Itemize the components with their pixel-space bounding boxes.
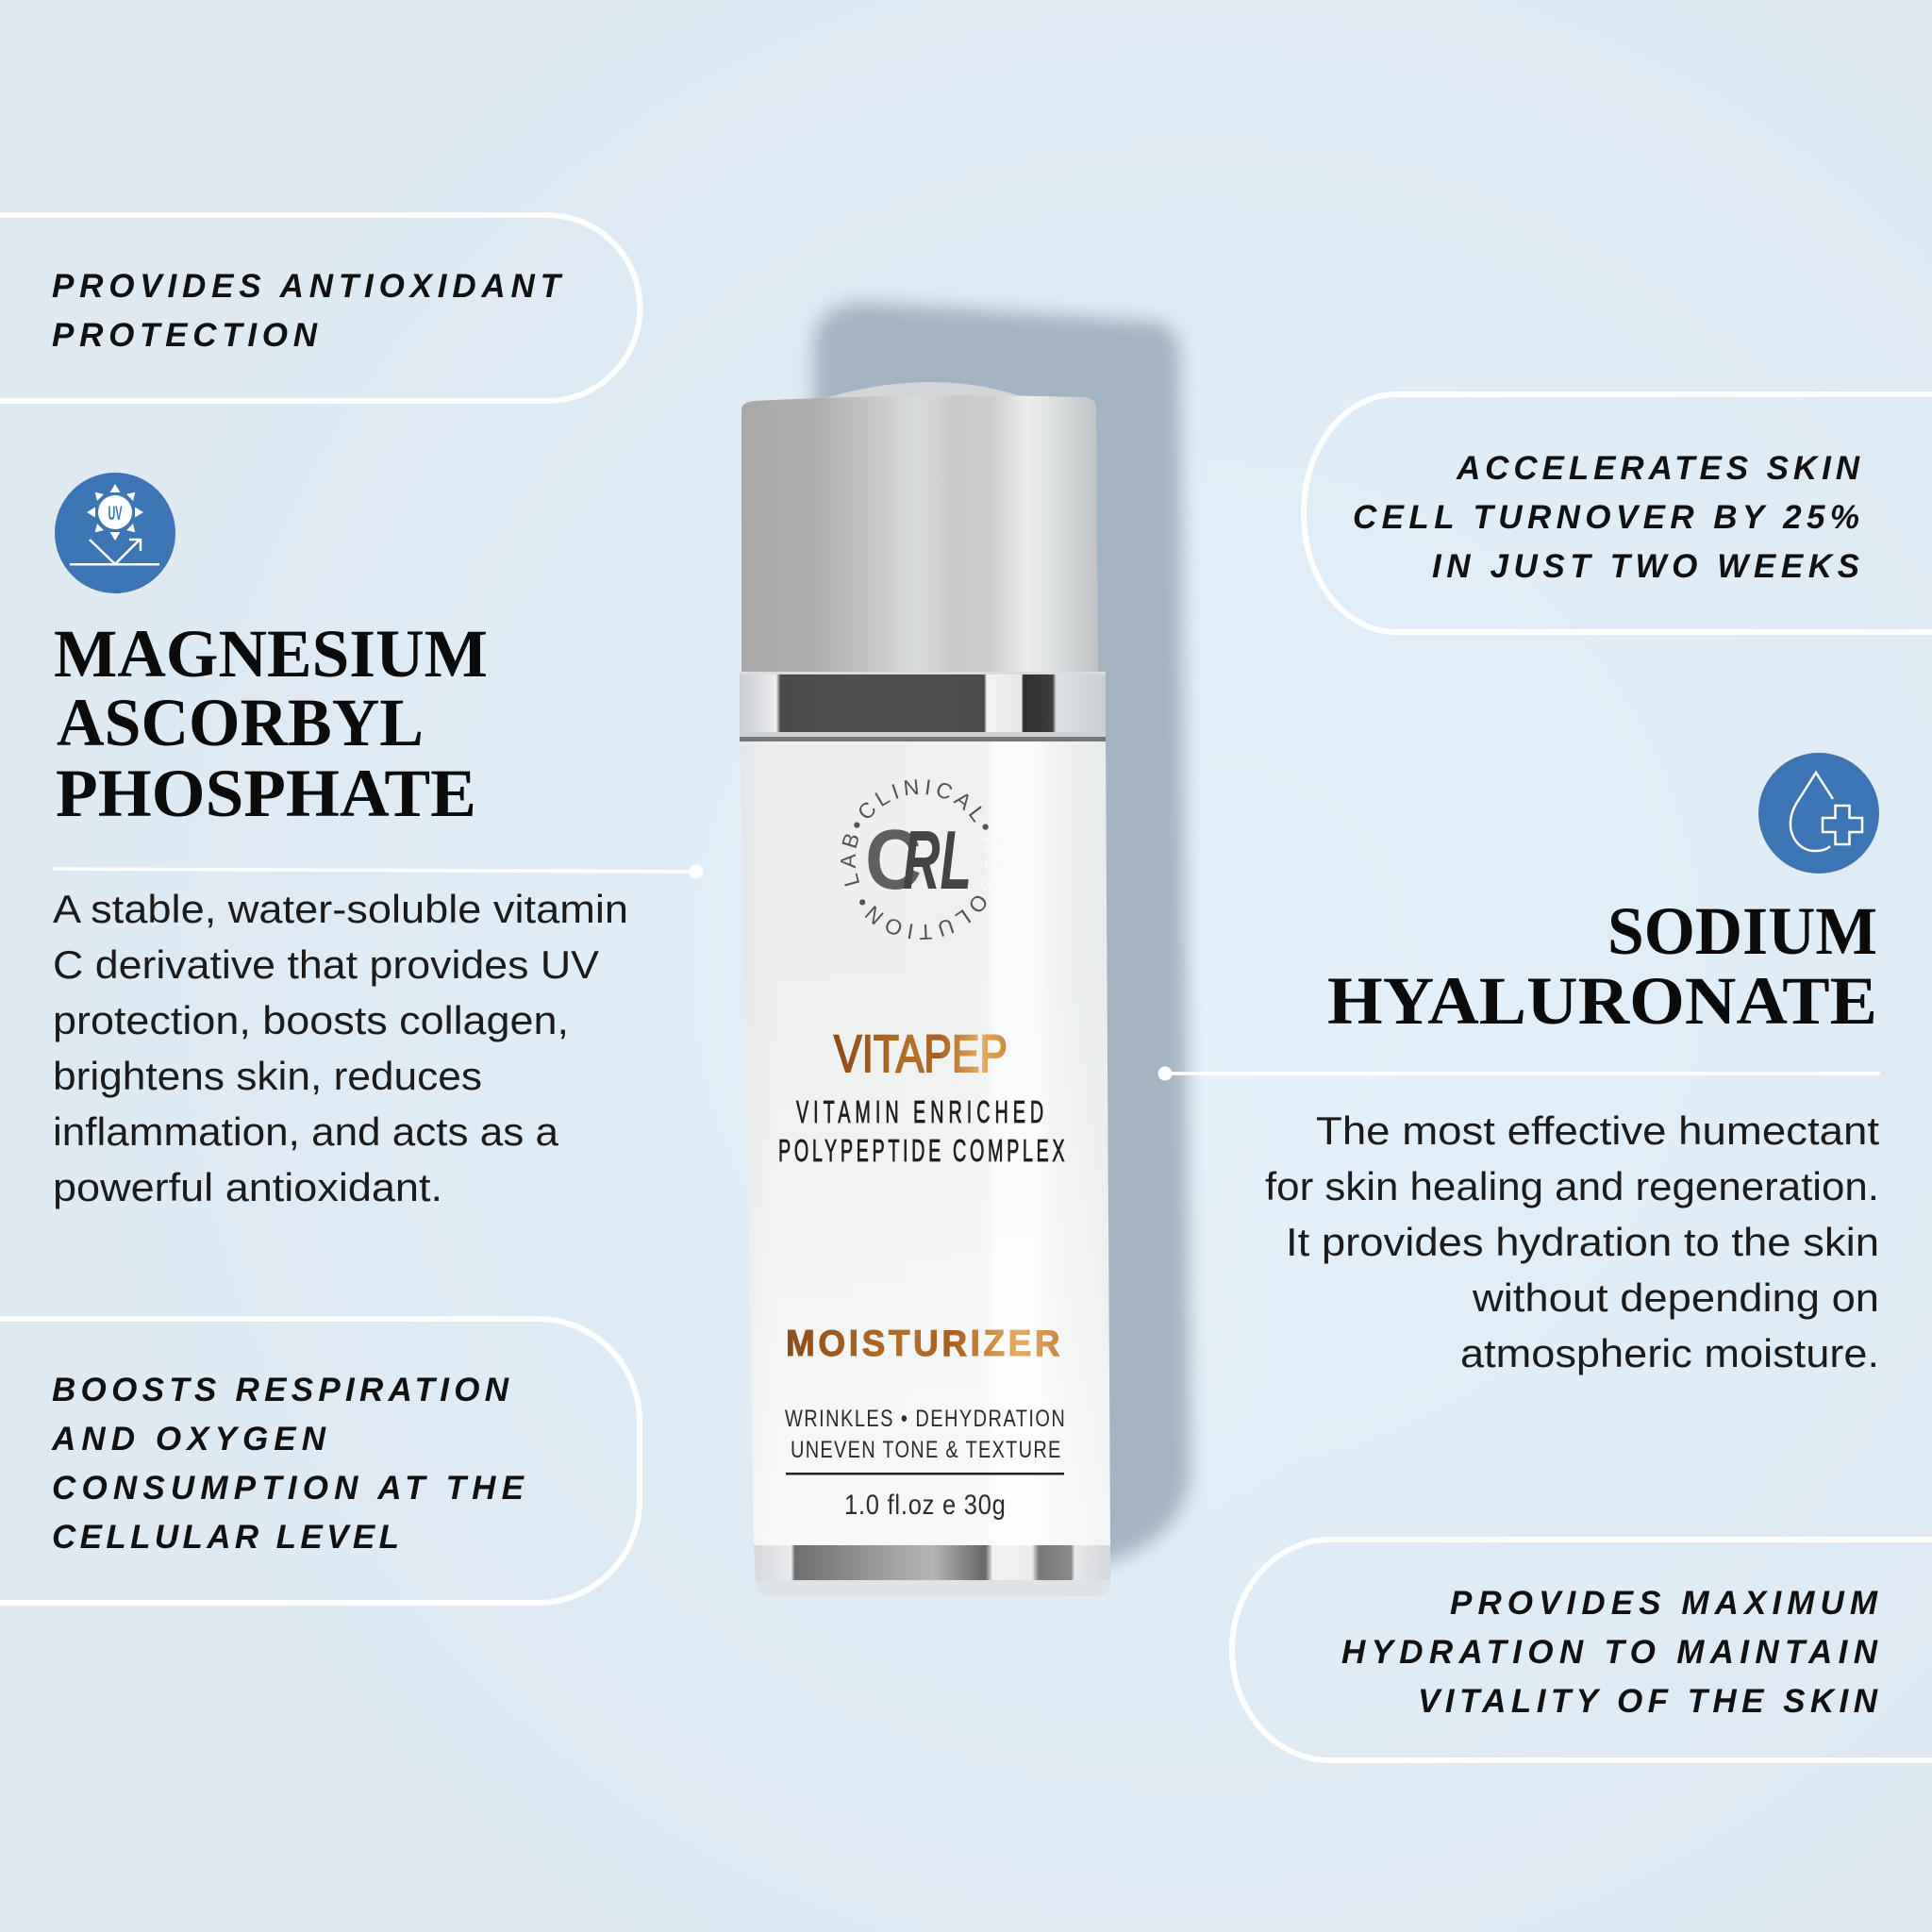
- description: for skin healing and regeneration.: [1265, 1164, 1879, 1208]
- silver cap: [741, 395, 1098, 673]
- description: atmospheric moisture.: [1460, 1331, 1879, 1375]
- icon: UV protection: UV: [108, 503, 123, 525]
- pill: skin cell turnover: CELL TURNOVER BY 25%: [1353, 499, 1859, 536]
- pill: cellular respiration: AND OXYGEN: [51, 1421, 326, 1457]
- bottle body: [741, 741, 1110, 1547]
- product type: MOISTURIZER: [786, 1324, 1060, 1364]
- CRL monogram: RL: [903, 813, 972, 907]
- pill: maximum hydration: VITALITY OF THE SKIN: [1418, 1683, 1878, 1720]
- heading: SODIUM: [1607, 893, 1877, 969]
- pill: antioxidant protection: [0, 215, 640, 401]
- heading: PHOSPHATE: [56, 756, 476, 831]
- chrome collar: [740, 672, 1106, 738]
- pill: cellular respiration: [0, 1319, 640, 1603]
- panel: sodium hyaluronate: [1158, 753, 1880, 1375]
- concerns list: UNEVEN TONE & TEXTURE: [791, 1437, 1060, 1463]
- pill: cellular respiration: CELLULAR LEVEL: [52, 1519, 399, 1556]
- concerns list: [785, 1406, 1065, 1463]
- CRL monogram: [865, 813, 972, 908]
- bottom chrome ring: [754, 1545, 1110, 1580]
- pill: maximum hydration: PROVIDES MAXIMUM: [1450, 1585, 1878, 1622]
- product bottle: [740, 382, 1110, 1596]
- pill: skin cell turnover: IN JUST TWO WEEKS: [1432, 548, 1859, 585]
- pill: cellular respiration: CONSUMPTION AT THE: [52, 1470, 525, 1507]
- brand name: VITAPEP: [834, 1024, 1008, 1083]
- concerns list: WRINKLES • DEHYDRATION: [785, 1406, 1065, 1432]
- heading: MAGNESIUM: [54, 616, 488, 691]
- panel: magnesium ascorbyl phosphate: [53, 473, 704, 1209]
- clear base: [756, 1580, 1110, 1596]
- description: C derivative that provides UV: [53, 942, 599, 987]
- description: It provides hydration to the skin: [1286, 1220, 1879, 1264]
- description: [53, 887, 628, 1209]
- description: without depending on: [1472, 1275, 1879, 1320]
- icon: water drop with plus: [1758, 753, 1879, 874]
- pill: antioxidant protection: PROVIDES ANTIOXIDANT: [52, 268, 563, 305]
- pill: cellular respiration: BOOSTS RESPIRATION: [52, 1372, 509, 1408]
- size: 1.0 fl.oz e 30g: [844, 1489, 1006, 1520]
- bottle cast shadow: [813, 302, 1255, 1561]
- pill: antioxidant protection: PROTECTION: [52, 317, 318, 354]
- subtitle: [778, 1094, 1065, 1168]
- description: powerful antioxidant.: [53, 1165, 442, 1209]
- description: The most effective humectant: [1316, 1108, 1879, 1153]
- heading: HYALURONATE: [1327, 963, 1877, 1039]
- subtitle: VITAMIN ENRICHED: [796, 1094, 1043, 1129]
- icon: UV protection: [55, 473, 175, 593]
- description: [1265, 1108, 1879, 1375]
- description: inflammation, and acts as a: [53, 1109, 559, 1154]
- pill: maximum hydration: [1232, 1540, 1932, 1760]
- connector line: [1158, 1066, 1880, 1081]
- description: brightens skin, reduces: [53, 1054, 482, 1098]
- pill: skin cell turnover: ACCELERATES SKIN: [1456, 450, 1860, 487]
- logo badge: [841, 779, 989, 940]
- subtitle: POLYPEPTIDE COMPLEX: [778, 1133, 1065, 1168]
- description: protection, boosts collagen,: [53, 998, 569, 1042]
- heading: [54, 616, 488, 831]
- pill: skin cell turnover: [1304, 394, 1932, 632]
- heading: [1327, 893, 1877, 1039]
- pump dome: [819, 382, 1030, 400]
- pill: maximum hydration: HYDRATION TO MAINTAIN: [1341, 1634, 1878, 1671]
- heading: ASCORBYL: [57, 685, 424, 760]
- description: A stable, water-soluble vitamin: [53, 887, 628, 931]
- CRL monogram: C: [865, 813, 922, 908]
- connector line: [53, 864, 704, 879]
- circular logo text: LAB•CLINICAL•RESOLUTION•: [841, 779, 989, 940]
